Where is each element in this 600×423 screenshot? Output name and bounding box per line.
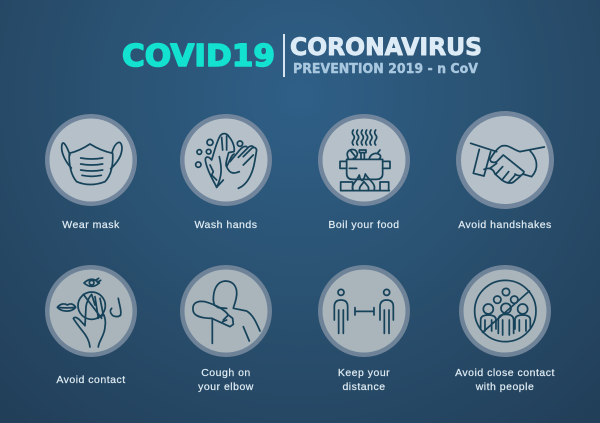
label: Boil your food — [328, 219, 400, 231]
icon: hand, eye, lips, nose — [57, 278, 121, 347]
label: Avoid close contact — [455, 367, 555, 379]
panel: wear mask — [45, 114, 137, 231]
circle badge — [456, 111, 554, 209]
panel: wash hands — [180, 114, 272, 231]
icon: face mask — [62, 142, 122, 184]
circle badge — [318, 114, 410, 206]
title: COVID19: COVID19 — [122, 39, 275, 74]
icon: boiling pot — [340, 130, 390, 191]
label: distance — [342, 381, 386, 393]
label — [338, 367, 390, 393]
title divider — [283, 34, 285, 77]
circle badge — [180, 114, 272, 206]
label: Avoid contact — [56, 374, 126, 386]
label: Avoid handshakes — [458, 219, 552, 231]
label — [455, 367, 555, 393]
label — [198, 367, 254, 393]
panel: avoid contact — [45, 265, 137, 386]
circle badge — [45, 114, 137, 206]
circle badge — [318, 265, 410, 357]
label: Wash hands — [195, 219, 257, 231]
subtitle: PREVENTION 2019 - n CoV — [293, 61, 479, 77]
circle badge — [180, 265, 272, 357]
title block — [122, 33, 482, 77]
panel: avoid handshakes — [456, 111, 554, 231]
circle badge — [459, 265, 551, 357]
icon: crowd prohibited — [475, 280, 536, 342]
label: Keep your — [338, 367, 390, 379]
label: with people — [475, 381, 534, 393]
icon: person coughing into elbow — [193, 281, 260, 343]
label: Cough on — [201, 367, 251, 379]
icon: two people apart — [334, 289, 393, 333]
circle badge — [45, 265, 137, 357]
title: CORONAVIRUS: CORONAVIRUS — [290, 33, 482, 61]
icon: handshake — [471, 143, 544, 183]
panel: boil your food — [318, 114, 410, 231]
icon: washing hands — [196, 134, 257, 188]
panel: keep your distance — [318, 265, 410, 393]
panel: cough on your elbow — [180, 265, 272, 393]
label: your elbow — [198, 381, 254, 393]
panel: avoid close contact — [455, 265, 555, 393]
label: Wear mask — [62, 219, 120, 231]
